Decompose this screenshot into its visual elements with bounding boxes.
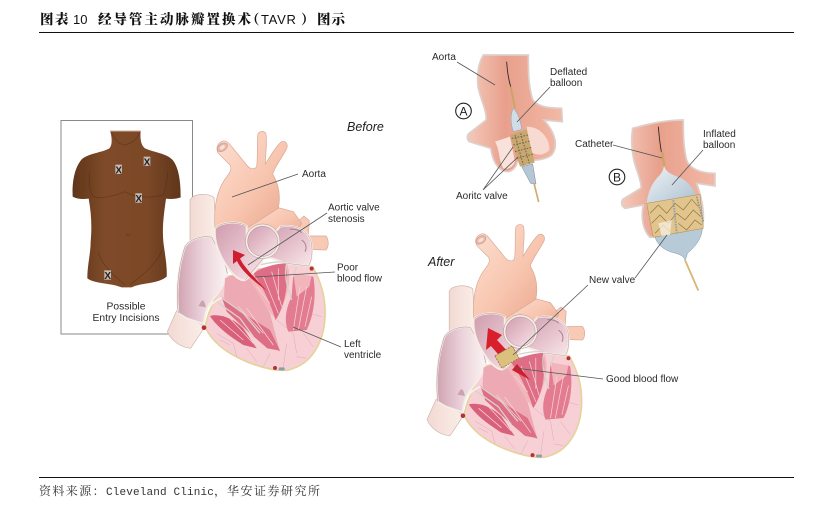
label: new valve (513, 235, 667, 355)
source note: ， (214, 482, 226, 499)
diagram A: deflated balloon (456, 55, 562, 202)
incision markers: X (104, 271, 111, 282)
title: TAVR (261, 12, 297, 27)
label: aorta (A): Aorta (432, 52, 456, 63)
icon: circled A: A (459, 104, 468, 118)
label: aortic valve stenosis: Aortic valve (328, 202, 380, 214)
label: deflated balloon: balloon (550, 78, 582, 89)
label: poor blood flow (255, 262, 383, 284)
incision markers (104, 158, 151, 282)
label: poor blood flow: Poor (337, 262, 358, 274)
label: aortic valve: Aoritc valve (456, 191, 508, 202)
icon: torso (73, 131, 181, 287)
incision markers: X (135, 194, 142, 205)
label: left ventricle (293, 327, 382, 361)
heading: before: Before (347, 120, 384, 134)
panel: possible entry incisions (61, 120, 192, 334)
icon: new valve stent (495, 346, 519, 368)
label: inflated balloon: balloon (703, 140, 735, 151)
label: left ventricle: Left (344, 339, 361, 350)
label: aorta: Aorta (302, 169, 326, 180)
icon: circled B: B (613, 170, 621, 184)
title: 10 (73, 12, 87, 27)
icon: circled A (456, 103, 471, 119)
label: good blood flow (515, 368, 679, 385)
caption: Possible (107, 302, 145, 312)
source note: Cleveland Clinic (106, 487, 214, 499)
incision markers: X (144, 158, 151, 168)
source note: 华安证券研究所 (227, 482, 322, 499)
label: deflated balloon (517, 67, 587, 122)
title: 图示 (317, 8, 346, 28)
label: aortic valve (456, 147, 518, 202)
heart: after (427, 225, 585, 457)
label: aortic valve stenosis: stenosis (328, 214, 365, 225)
caption: Entry Incisions (93, 313, 159, 324)
diagram B: inflated balloon (609, 120, 715, 291)
label: catheter (575, 139, 662, 158)
heart: before (167, 131, 328, 370)
label: aortic valve stenosis (248, 202, 380, 265)
label: aorta (A) (432, 52, 495, 85)
title: 经导管主动脉瓣置换术 (98, 8, 253, 28)
label: left ventricle: ventricle (344, 350, 382, 361)
source note: 资料来源： (39, 482, 106, 499)
label: good blood flow: Good blood flow (606, 374, 679, 385)
label: poor blood flow: blood flow (337, 274, 383, 284)
incision markers: X (115, 166, 122, 176)
label: catheter: Catheter (575, 139, 614, 150)
title: ） (301, 8, 314, 28)
label: inflated balloon: Inflated (703, 129, 736, 140)
arrow: poor blood flow (233, 250, 267, 291)
icon: circled B (609, 169, 625, 185)
label: new valve: New valve (589, 275, 636, 286)
title: 图表 (40, 8, 70, 28)
label: deflated balloon: Deflated (550, 67, 587, 78)
arrow: good blood flow (486, 328, 530, 380)
label: inflated balloon (672, 129, 736, 185)
heading: after: After (427, 255, 455, 269)
label: aorta (232, 169, 326, 197)
title: （ (246, 8, 260, 28)
